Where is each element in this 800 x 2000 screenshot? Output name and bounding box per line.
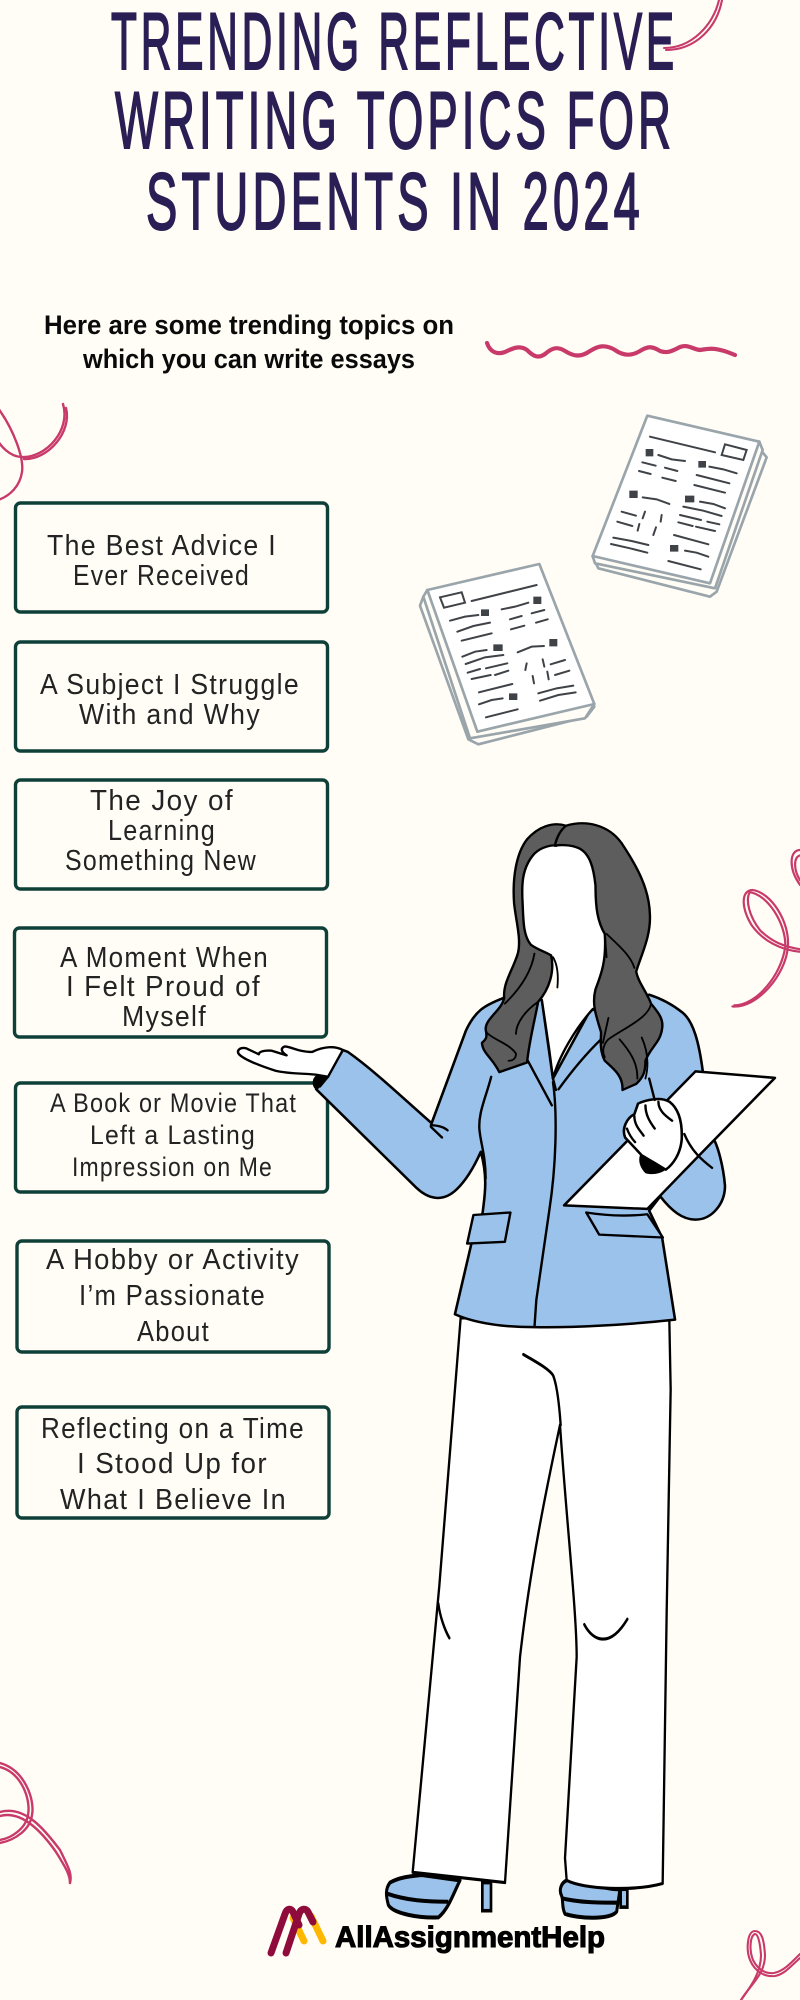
topic box 5: A Book or Movie That [50, 1088, 297, 1118]
left hand [238, 1046, 343, 1089]
topic box 5: Impression on Me [72, 1152, 273, 1182]
decorative swirl: bottom right [741, 1931, 800, 2000]
jacket lapels and seams [431, 1000, 601, 1327]
intro text [44, 310, 454, 374]
topic box 5: Left a Lasting [90, 1120, 256, 1150]
logo: AllAssignmentHelp [271, 1909, 605, 1954]
topic box 4: A Moment When [60, 942, 269, 974]
topic box 2: With and Why [79, 699, 261, 731]
decorative swirl: bottom left [0, 1763, 71, 1883]
topic box 2 [16, 642, 328, 751]
logo mark [271, 1909, 323, 1953]
topic box 5 [16, 1083, 328, 1192]
illustration: woman's legs, trousers and shoes [386, 1318, 671, 1918]
topic box 6: I’m Passionate [79, 1280, 266, 1312]
topic box 7: What I Believe In [60, 1484, 287, 1516]
topic box 4: Myself [122, 1001, 207, 1033]
topic box 6 [17, 1241, 329, 1352]
right hand [624, 1079, 712, 1174]
topic box 4 [14, 928, 326, 1037]
title [111, 0, 678, 247]
topic box 7: Reflecting on a Time [41, 1413, 305, 1445]
topic box 1: The Best Advice I [47, 530, 277, 562]
topic box 6: About [137, 1316, 210, 1348]
clipboard [564, 1071, 775, 1209]
jacket [316, 995, 725, 1327]
topic box 7 [17, 1407, 329, 1518]
topic box 6: A Hobby or Activity [46, 1244, 300, 1276]
logo wordmark: AllAssignmentHelp [335, 1921, 605, 1954]
hair [482, 823, 662, 1090]
intro text: Here are some trending topics on [44, 310, 454, 340]
document: lower left sheets [420, 564, 594, 744]
topic box 7: I Stood Up for [77, 1448, 268, 1480]
topic box 3: The Joy of [90, 785, 234, 817]
topic box 3: Something New [65, 845, 257, 877]
right pocket flap [586, 1212, 663, 1237]
decorative swirl: top right [664, 0, 722, 50]
document: top right sheets [593, 416, 767, 597]
illustration: woman's upper body with clipboard [238, 823, 800, 1327]
topic box 1: Ever Received [73, 560, 250, 592]
decorative swirl: right middle [732, 850, 800, 1007]
trousers [413, 1318, 671, 1888]
topic box 3 [16, 780, 328, 889]
face and neck [522, 845, 605, 1079]
topic box 3: Learning [108, 815, 216, 847]
left shoe [386, 1875, 491, 1918]
topic box 1 [16, 503, 328, 612]
decorative swirl: upper left [0, 404, 67, 500]
decorative squiggle [487, 343, 735, 357]
topic box 2: A Subject I Struggle [40, 669, 300, 701]
intro text: which you can write essays [82, 344, 415, 374]
topic box 4: I Felt Proud of [66, 971, 261, 1003]
left pocket flap [467, 1212, 510, 1244]
right shoe [560, 1880, 627, 1918]
